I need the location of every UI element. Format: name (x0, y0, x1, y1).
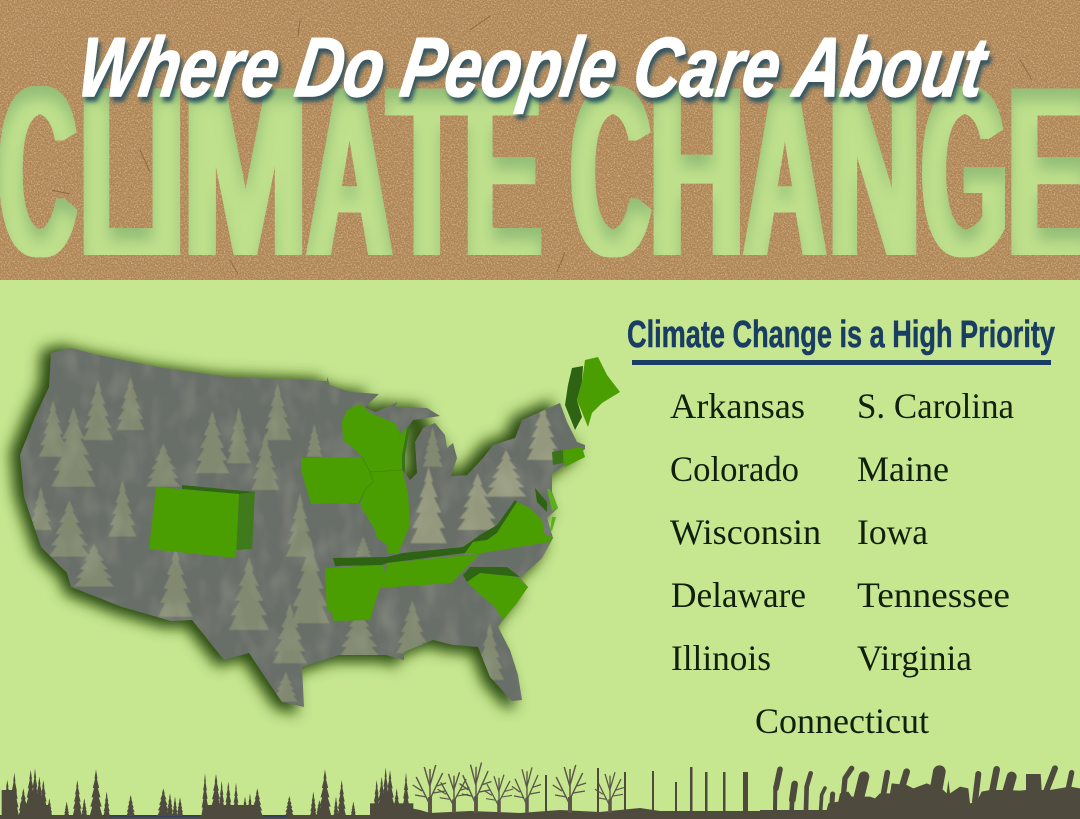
state: Maine (577, 357, 620, 427)
header panel: kraft paper (0, 0, 1080, 280)
heading: CLIMATE CHANGE cut-out letters: E (464, 37, 542, 307)
state: Tennessee (380, 554, 480, 588)
state list: Maine (857, 449, 949, 489)
heading: CLIMATE CHANGE cut-out letters: G (922, 36, 1008, 306)
heading: CLIMATE CHANGE cut-out letters: T (388, 38, 466, 307)
state: Virginia (465, 502, 553, 553)
poles (545, 767, 748, 812)
state side shadows (182, 366, 583, 582)
state: Iowa (301, 457, 373, 504)
state list: Wisconsin (670, 512, 821, 552)
state list: Tennessee (857, 575, 1010, 615)
state list: Iowa (857, 512, 928, 552)
state list: Delaware (671, 575, 806, 615)
footer silhouette: forest to factories (0, 763, 1080, 819)
heading: CLIMATE CHANGE cut-out letters: C (0, 35, 77, 307)
heading: CLIMATE CHANGE cut-out letters: N (828, 38, 921, 307)
state list: Connecticut (755, 701, 929, 741)
state list (670, 386, 1014, 741)
state list: Arkansas (670, 386, 805, 426)
state: Arkansas (325, 565, 385, 621)
Virginia eastern shore (550, 517, 556, 531)
water strip (110, 815, 287, 817)
heading: CLIMATE CHANGE cut-out letters: C (570, 36, 651, 306)
heading: CLIMATE CHANGE cut-out letters: I (148, 37, 185, 307)
state: Illinois (360, 470, 410, 554)
map drop shadow (10, 345, 578, 714)
state list: Colorado (670, 449, 799, 489)
state list: Virginia (857, 638, 972, 678)
map body with forest image (20, 348, 585, 707)
heading: CLIMATE CHANGE cut-out letters: L (80, 37, 154, 307)
heading: CLIMATE CHANGE cut-out letters: H (649, 37, 745, 307)
conifer forest (2, 767, 413, 816)
state border lines (359, 457, 402, 503)
heading: CLIMATE CHANGE cut-out letters: A (307, 38, 392, 307)
state: Delaware (547, 489, 558, 511)
heading: CLIMATE CHANGE cut-out letters: A (744, 37, 826, 308)
heading: CLIMATE CHANGE cut-out letters (0, 35, 1080, 308)
map: United States with forest texture (0, 330, 640, 720)
bare trees (413, 763, 624, 813)
state: Wisconsin (342, 404, 407, 472)
ground (0, 808, 1080, 819)
heading underline (632, 360, 1051, 365)
heading: CLIMATE CHANGE cut-out letters: M (182, 35, 308, 307)
background: green lower panel (0, 280, 1080, 819)
factory smoke stacks and skyline (760, 768, 1080, 819)
highlighted states (149, 357, 620, 621)
state list: Illinois (671, 638, 771, 678)
state: South Carolina (467, 573, 528, 620)
state list: S. Carolina (857, 386, 1014, 426)
state: Connecticut (563, 447, 585, 467)
state: Colorado (149, 487, 239, 558)
